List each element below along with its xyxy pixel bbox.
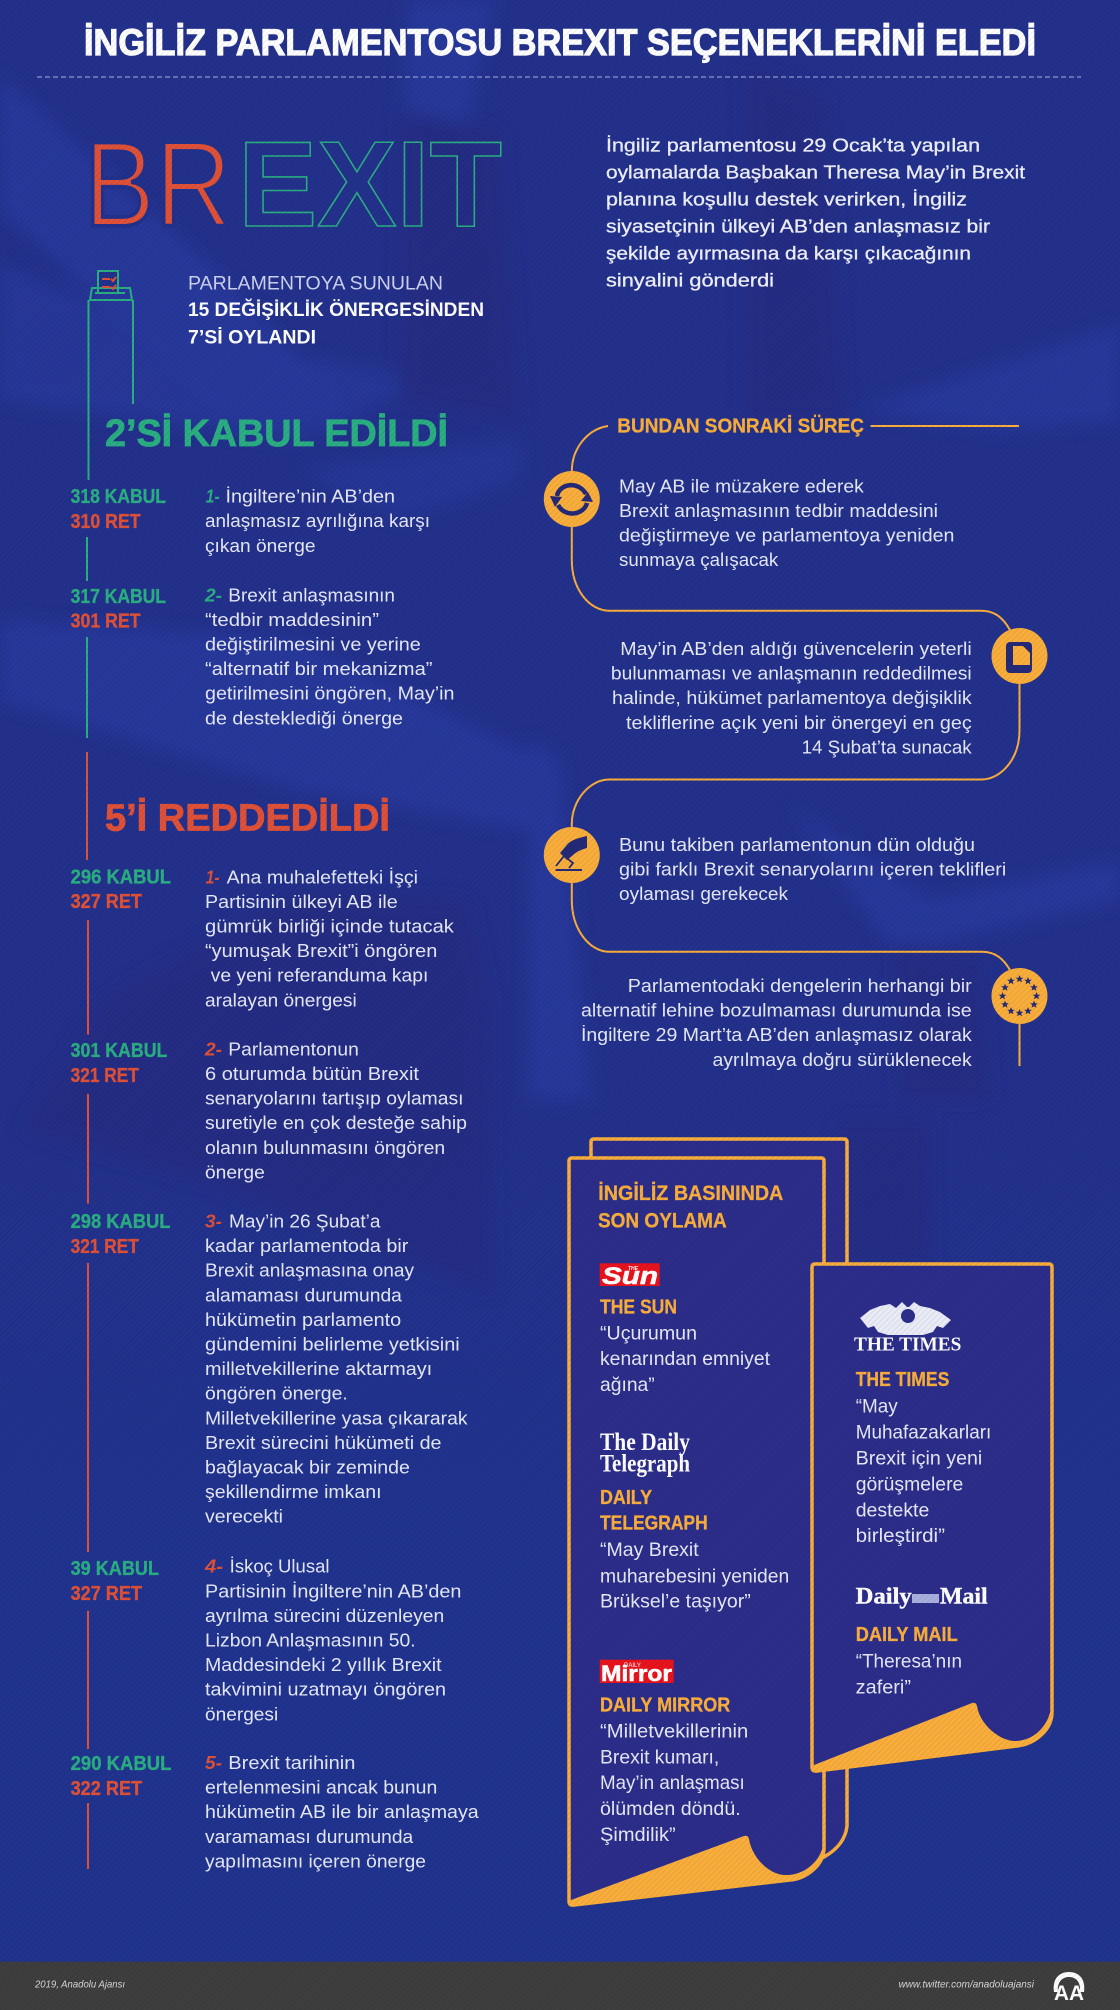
page curl <box>812 1703 1053 1772</box>
subheading: votes summary <box>188 273 484 348</box>
step 1 text: Brexit anlaşmasının tedbir maddesini <box>619 501 938 521</box>
Daily Mirror quote: “Milletvekillerinin <box>600 1720 748 1742</box>
front sheet <box>569 1158 824 1905</box>
logo: The Daily Telegraph: Telegraph <box>600 1451 690 1478</box>
Daily Telegraph quote: muharebesini yeniden <box>600 1566 789 1588</box>
rejected motion 4: 39 KABUL <box>71 1558 159 1580</box>
rejected motion 4: Partisinin İngiltere’nin AB’den <box>205 1581 461 1601</box>
Daily Mail quote: “Theresa’nın <box>856 1650 962 1672</box>
intro text: İngiliz parlamentosu 29 Ocak’ta yapılan <box>606 136 980 156</box>
rejected motion 3: milletvekillerine aktarmayı <box>205 1359 432 1379</box>
rejected motion 1: 1- <box>206 867 220 887</box>
wordmark: BREXIT: BR <box>84 116 232 252</box>
rejected motion 2: senaryolarını tartışıp oylaması <box>205 1089 464 1109</box>
step 3 text: oylaması gerekecek <box>619 884 789 904</box>
press heading: SON OYLAMA <box>598 1209 727 1232</box>
rejected motion 5: 5- <box>205 1753 222 1773</box>
icon: EU stars <box>992 968 1048 1024</box>
rejected motion 3: 298 KABUL <box>71 1211 170 1233</box>
rejected motion 3: alamaması durumunda <box>205 1285 403 1305</box>
intro text: sinyalini gönderdi <box>606 271 774 291</box>
Daily Telegraph quote <box>600 1487 789 1612</box>
logo: Daily Mirror: DAILY <box>624 1663 641 1669</box>
rejected motion 5: yapılmasını içeren önerge <box>205 1851 426 1871</box>
logo: The Sun: Sun <box>602 1263 658 1290</box>
accepted motion 2: Brexit anlaşmasının <box>228 585 395 605</box>
rejected motion 4 <box>71 1557 461 1724</box>
icon: ballot box <box>88 271 133 480</box>
The Times quote: Muhafazakarları <box>856 1422 991 1444</box>
logo: Daily Mail: Mail <box>940 1583 988 1608</box>
rejected motion 1: 327 RET <box>71 891 142 913</box>
step 2 text: halinde, hükümet parlamentoya değişiklik <box>612 688 973 708</box>
step 2 text: May’in AB’den aldığı güvencelerin yeterli <box>620 639 972 659</box>
credit: 2019, Anadolu Ajansı <box>34 1979 125 1991</box>
rejected motion 3: şekillendirme imkanı <box>205 1482 382 1502</box>
rejected motion 2: 301 KABUL <box>71 1040 167 1062</box>
logo: AA: AA <box>1054 1982 1084 2005</box>
accepted motion 2: de desteklediği önerge <box>205 708 403 728</box>
rejected motion 1: “yumuşak Brexit”i öngören <box>205 941 437 961</box>
rejected motion 4: takvimini uzatmayı öngören <box>205 1680 446 1700</box>
rejected motion 3: Brexit sürecini hükümeti de <box>205 1433 442 1453</box>
intro text: şekilde ayırmasına da karşı çıkacağının <box>606 244 971 264</box>
panel: British press, right card <box>812 1264 1053 1772</box>
rejected motion 3: kadar parlamentoda bir <box>205 1236 408 1256</box>
rejected motion 3: May’in 26 Şubat’a <box>229 1212 382 1232</box>
title: İNGİLİZ PARLAMENTOSU BREXIT SEÇENEKLERİNİ ELEDİ <box>84 22 1036 63</box>
rejected motion 3: verecekti <box>205 1507 283 1527</box>
logo: Daily Mirror: Mirror <box>601 1661 672 1686</box>
heading: rejected: 5’İ REDDEDİLDİ <box>105 798 390 840</box>
rejected motion 2: olanın bulunmasını öngören <box>205 1138 445 1158</box>
rejected motion 3: öngören önerge. <box>205 1384 348 1404</box>
accepted motion 2 <box>71 585 454 728</box>
The Times quote: Brexit için yeni <box>856 1448 982 1470</box>
The Sun quote: THE SUN <box>600 1296 677 1318</box>
sheet <box>812 1264 1052 1771</box>
logo: Daily Mail <box>856 1583 988 1608</box>
rejected motion 3: 321 RET <box>71 1236 139 1258</box>
rejected motion 2: Parlamentonun <box>228 1039 359 1059</box>
rejected motion 3: Milletvekillerine yasa çıkararak <box>205 1408 469 1428</box>
step 4 text <box>581 976 973 1070</box>
panel: British press, left cards <box>569 1139 847 1906</box>
Daily Mirror quote: May’in anlaşması <box>600 1772 745 1794</box>
rejected motion 2: suretiyle en çok desteğe sahip <box>205 1113 467 1133</box>
wordmark: BREXIT: EXIT <box>238 116 502 252</box>
step 1 text: sunmaya çalışacak <box>619 550 779 570</box>
step 3 text <box>619 835 1006 904</box>
panel: rejected motions <box>71 752 480 1871</box>
step 2 text <box>611 639 973 758</box>
logo: Daily Mail: Daily <box>856 1583 912 1608</box>
rejected motion 5: ertelenmesini ancak bunun <box>205 1778 437 1798</box>
Daily Mirror quote: Brexit kumarı, <box>600 1746 719 1768</box>
rejected motion 3: 3- <box>205 1212 222 1232</box>
rejected motion 4: Lizbon Anlaşmasının 50. <box>205 1630 416 1650</box>
rejected motion 4: önergesi <box>205 1704 278 1724</box>
step 4 text: İngiltere 29 Mart’ta AB’den anlaşmasız olarak <box>581 1025 973 1045</box>
logo: The Times crest and name: THE TIMES <box>854 1334 961 1356</box>
rejected motion 2: 6 oturumda bütün Brexit <box>205 1064 419 1084</box>
The Times quote: “May <box>856 1396 898 1418</box>
rejected motion 4: 4- <box>204 1557 223 1577</box>
logo: The Daily Telegraph: The Daily <box>600 1429 690 1456</box>
page curl <box>569 1836 825 1906</box>
rejected motion 5 <box>71 1753 480 1871</box>
rejected motion 4: Maddesindeki 2 yıllık Brexit <box>205 1655 442 1675</box>
rejected motion 3: bağlayacak bir zeminde <box>205 1458 410 1478</box>
rejected motion 4: 327 RET <box>71 1583 142 1605</box>
logo: The Times crest and name <box>854 1302 961 1356</box>
The Times quote: birleştirdi” <box>856 1525 945 1547</box>
accepted motion 1: İngiltere’nin AB’den <box>226 487 395 507</box>
Daily Telegraph quote: TELEGRAPH <box>600 1513 708 1535</box>
social link: www.twitter.com/anadoluajansi <box>899 1979 1035 1991</box>
logo: The Sun: THE <box>628 1266 639 1272</box>
rejected motion 4: İskoç Ulusal <box>230 1557 330 1577</box>
rejected motion 1: Partisinin ülkeyi AB ile <box>205 892 398 912</box>
accepted motion 1: 310 RET <box>71 511 141 533</box>
The Sun quote <box>600 1296 771 1396</box>
rejected motion 3: hükümetin parlamento <box>205 1310 401 1330</box>
Daily Mirror quote: Şimdilik” <box>600 1824 676 1846</box>
accepted motion 2: “alternatif bir mekanizma” <box>205 659 433 679</box>
rejected motion 5: hükümetin AB ile bir anlaşmaya <box>205 1802 480 1822</box>
accepted motion 2: 317 KABUL <box>71 586 166 608</box>
rejected motion 4: ayrılma sürecini düzenleyen <box>205 1606 444 1626</box>
step 1 text <box>619 476 954 570</box>
Daily Telegraph quote: “May Brexit <box>600 1539 699 1561</box>
panel: accepted motions <box>71 486 454 738</box>
The Times quote <box>856 1369 991 1547</box>
step 4 text: Parlamentodaki dengelerin herhangi bir <box>628 976 972 996</box>
rejected motion 3: gündemini belirleme yetkisini <box>205 1334 460 1354</box>
rejected motion 3 <box>71 1211 469 1527</box>
The Times quote: görüşmelere <box>856 1474 963 1496</box>
rejected motion 2: 321 RET <box>71 1065 139 1087</box>
Daily Mirror quote <box>600 1695 748 1846</box>
step 3 text: gibi farklı Brexit senaryolarını içeren teklifleri <box>619 860 1006 880</box>
timeline connector <box>572 426 1020 1066</box>
icon: hand voting <box>544 827 600 883</box>
Daily Telegraph quote: DAILY <box>600 1487 653 1509</box>
wordmark: BREXIT <box>84 116 502 252</box>
Daily Mail quote: zaferi” <box>856 1676 911 1698</box>
accepted motion 1: çıkan önerge <box>205 536 316 556</box>
step 2 text: bulunmaması ve anlaşmanın reddedilmesi <box>611 664 972 684</box>
Daily Mirror quote: DAILY MIRROR <box>600 1695 731 1717</box>
icon: document <box>992 628 1048 684</box>
step 1 text: May AB ile müzakere ederek <box>619 476 865 496</box>
heading: accepted: 2’Sİ KABUL EDİLDİ <box>105 413 448 455</box>
rejected motion 1 <box>71 866 455 1010</box>
step 2 text: 14 Şubat’ta sunacak <box>802 738 973 758</box>
Daily Mail quote <box>856 1624 962 1698</box>
intro text: oylamalarda Başbakan Theresa May’in Brexit <box>606 163 1025 183</box>
heading: next steps: BUNDAN SONRAKİ SÜREÇ <box>617 415 864 438</box>
footer bar <box>0 1962 1120 2010</box>
step 1 text: değiştirmeye ve parlamentoya yeniden <box>619 526 954 546</box>
icon: refresh <box>544 471 600 527</box>
rejected motion 1: gümrük birliği içinde tutacak <box>205 916 455 936</box>
rejected motion 5: varamaması durumunda <box>205 1827 414 1847</box>
logo: AA <box>1054 1972 1084 2005</box>
back sheet <box>591 1139 847 1857</box>
rejected motion 1: Ana muhalefetteki İşçi <box>227 867 418 887</box>
rejected motion 5: 290 KABUL <box>71 1753 172 1775</box>
subheading: votes summary: PARLAMENTOYA SUNULAN <box>188 273 443 294</box>
intro text <box>606 136 1025 291</box>
press heading <box>598 1182 783 1232</box>
step 4 text: ayrılmaya doğru sürüklenecek <box>712 1050 973 1070</box>
rejected motion 2: önerge <box>205 1162 265 1182</box>
panel: next steps <box>544 415 1048 1070</box>
rejected motion 3: Brexit anlaşmasına onay <box>205 1261 414 1281</box>
The Times quote: destekte <box>856 1500 929 1522</box>
accepted motion 2: getirilmesini öngören, May’in <box>205 684 454 704</box>
intro text: planına koşullu destek verirken, İngiliz <box>606 190 967 210</box>
accepted motion 1: anlaşmasız ayrılığına karşı <box>205 511 430 531</box>
The Sun quote: “Uçurumun <box>600 1322 697 1344</box>
step 4 text: alternatif lehine bozulmaması durumunda ise <box>581 1001 972 1021</box>
rejected motion 1: 296 KABUL <box>71 866 171 888</box>
accepted motion 2: 2- <box>204 585 222 605</box>
accepted motion 2: “tedbir maddesinin” <box>205 610 379 630</box>
Daily Telegraph quote: Brüksel’e taşıyor” <box>600 1590 751 1612</box>
rejected motion 5: 322 RET <box>71 1778 142 1800</box>
accepted motion 2: 301 RET <box>71 611 141 633</box>
rejected motion 1: aralayan önergesi <box>205 990 357 1010</box>
step 2 text: tekliflerine açık yeni bir önergeyi en geç <box>626 713 972 733</box>
accepted motion 1 <box>71 486 430 556</box>
accepted motion 2: değiştirilmesini ve yerine <box>205 634 421 654</box>
subheading: votes summary: 7’Sİ OYLANDI <box>188 327 316 348</box>
The Sun quote: ağına” <box>600 1374 655 1396</box>
rejected motion 5: Brexit tarihinin <box>228 1753 355 1773</box>
Daily Mirror quote: ölümden döndü. <box>600 1798 741 1820</box>
Daily Mail quote: DAILY MAIL <box>856 1624 958 1646</box>
press heading: İNGİLİZ BASININDA <box>598 1182 783 1205</box>
rejected motion 2 <box>71 1039 467 1182</box>
The Sun quote: kenarından emniyet <box>600 1348 771 1370</box>
subheading: votes summary: 15 DEĞİŞİKLİK ÖNERGESİNDEN <box>188 299 484 321</box>
logo: The Daily Telegraph <box>600 1429 690 1478</box>
step 3 text: Bunu takiben parlamentonun dün olduğu <box>619 835 975 855</box>
intro text: siyasetçinin ülkeyi AB’den anlaşmasız bir <box>606 217 990 237</box>
The Times quote: THE TIMES <box>856 1369 949 1391</box>
rejected motion 1: ve yeni referanduma kapı <box>211 966 428 986</box>
accepted motion 1: 1- <box>206 487 220 507</box>
accepted motion 1: 318 KABUL <box>71 486 166 508</box>
rejected motion 2: 2- <box>204 1039 222 1059</box>
